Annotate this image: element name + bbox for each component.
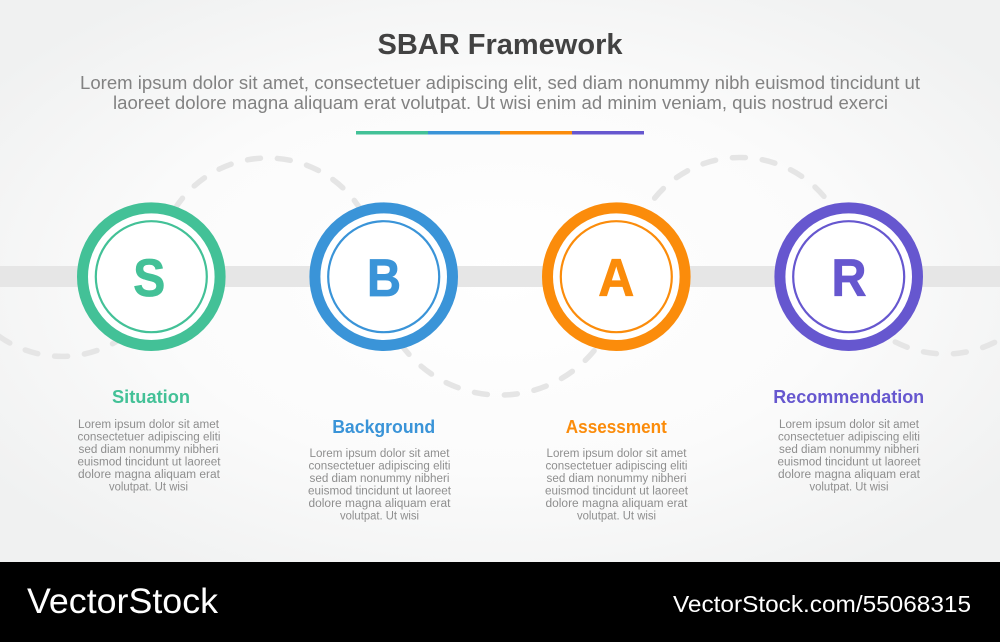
body text: Situation: Lorem ipsum dolor sit amet (78, 419, 220, 431)
body text: Background: dolore magna aliquam erat (308, 498, 451, 510)
heading: Background: Background (332, 417, 435, 437)
panel: Background (308, 417, 452, 522)
body text: Background: consectetuer adipiscing eliti (308, 460, 450, 472)
body text: Recommendation: volutpat. Ut wisi (810, 482, 888, 494)
step A: circle (548, 208, 685, 346)
subtitle: Lorem ipsum dolor sit amet, consectetuer adipiscing elit, sed diam nonummy nibh euismod tincidunt ut (80, 73, 920, 93)
heading: Situation: Situation (112, 387, 190, 407)
step B: circle (315, 208, 453, 346)
body text: Assessment: volutpat. Ut wisi (577, 510, 656, 522)
body text: Background: euismod tincidunt ut laoreet (308, 486, 452, 498)
body text: Background: volutpat. Ut wisi (340, 510, 419, 522)
body text: Situation: consectetuer adipiscing eliti (78, 432, 220, 444)
body text: Recommendation: dolore magna aliquam erat (778, 469, 921, 481)
step R: circle: R (832, 249, 866, 308)
timeline bar (0, 266, 1000, 287)
body text: Situation (78, 419, 221, 494)
step B: circle: B (367, 249, 401, 308)
body text: Background (308, 448, 452, 522)
body text: Recommendation: consectetuer adipiscing eliti (778, 432, 920, 444)
heading: Assessment: Assessment (566, 417, 667, 437)
footer url: VectorStock.com/55068315 (673, 591, 971, 617)
body text: Situation: volutpat. Ut wisi (109, 482, 188, 494)
step R: circle (780, 208, 918, 346)
body text: Background: Lorem ipsum dolor sit amet (310, 448, 450, 460)
dashed wave connector (0, 157, 1000, 395)
body text: Assessment: consectetuer adipiscing eliti (546, 460, 688, 472)
subtitle: laoreet dolore magna aliquam erat volutpat. Ut wisi enim ad minim veniam, quis nostrud exerci (113, 93, 888, 113)
body text: Background: sed diam nonummy nibheri (310, 473, 450, 485)
subtitle (80, 73, 920, 113)
body text: Assessment: euismod tincidunt ut laoreet (545, 486, 689, 498)
footer bar (0, 562, 1000, 642)
step S: circle (82, 208, 220, 346)
panel: Assessment (545, 417, 689, 522)
body text: Assessment: Lorem ipsum dolor sit amet (546, 448, 687, 460)
heading: Recommendation: Recommendation (773, 387, 924, 407)
footer logo text: VectorStock (27, 582, 219, 621)
panel: Situation (78, 387, 221, 494)
body text: Assessment (545, 448, 689, 522)
body text: Recommendation: sed diam nonummy nibheri (779, 444, 919, 456)
body text: Recommendation (778, 419, 921, 494)
body text: Assessment: sed diam nonummy nibheri (546, 473, 686, 485)
title: SBAR Framework (378, 29, 623, 61)
body text: Recommendation: euismod tincidunt ut laoreet (778, 456, 921, 468)
panel: Recommendation (773, 387, 924, 494)
body text: Situation: sed diam nonummy nibheri (78, 444, 218, 456)
body text: Assessment: dolore magna aliquam erat (546, 498, 688, 510)
step A: circle: A (598, 249, 634, 308)
body text: Recommendation: Lorem ipsum dolor sit amet (779, 419, 920, 431)
colour divider (356, 131, 644, 134)
step S: circle: S (133, 249, 165, 308)
body text: Situation: euismod tincidunt ut laoreet (78, 456, 221, 468)
body text: Situation: dolore magna aliquam erat (78, 469, 221, 481)
